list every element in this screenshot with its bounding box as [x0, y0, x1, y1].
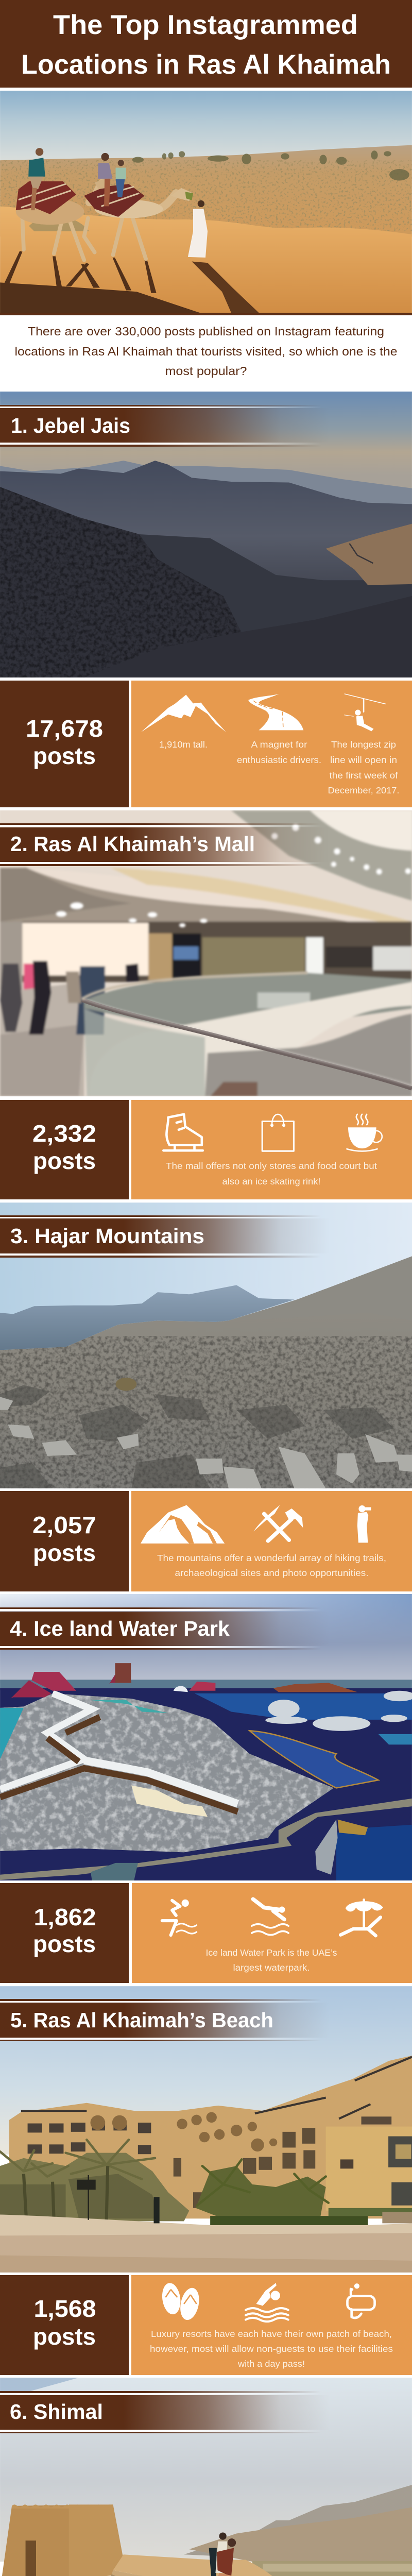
- stat: 2,332 posts: posts: [33, 1147, 96, 1174]
- facts panel: Jebel Jais: [131, 681, 412, 807]
- intro text: [14, 325, 398, 378]
- title banner: [0, 0, 412, 88]
- icon: zip line: [344, 694, 385, 731]
- stat: 17,678 posts: posts: [33, 742, 96, 769]
- facts panel: mall: [131, 1100, 412, 1199]
- stat: 1,862 posts: 1,862: [34, 1904, 96, 1930]
- facts panel: water park: [132, 1883, 412, 1983]
- heading: 5. Ras Al Khaimah's Beach: 5. Ras Al Khaimah’s Beach: [10, 2008, 273, 2032]
- facts panel: Jebel Jais: The longest zip: [331, 739, 396, 750]
- facts panel: water park: Ice land Water Park is the UAE’s: [206, 1947, 337, 1958]
- heading: 4. Ice land Water Park: 4. Ice land Water Park: [10, 1617, 230, 1640]
- facts panel: Hajar Mountains: archaeological sites and photo opportunities.: [175, 1568, 369, 1578]
- section 4: Ice land Water Park: [0, 1594, 412, 1983]
- icon: snorkel mask: [347, 2283, 375, 2318]
- section 2: Ras Al Khaimah's Mall: [0, 810, 412, 1199]
- stat: 1,862 posts: posts: [33, 1930, 96, 1957]
- photo: Hajar Mountains: [0, 1202, 412, 1488]
- stat: 17,678 posts: 17,678: [26, 715, 103, 742]
- icon: snowy mountain: [141, 1505, 225, 1544]
- heading: 3. Hajar Mountains: 3. Hajar Mountains: [10, 1224, 204, 1248]
- icon: diver on platform: [162, 1900, 197, 1935]
- facts panel: mall: The mall offers not only stores and food court but: [166, 1161, 377, 1171]
- facts panel: beach: [131, 2275, 412, 2375]
- stat: 2,057 posts: [0, 1491, 129, 1591]
- facts panel: Jebel Jais: line will open in: [330, 755, 397, 765]
- photo: Jebel Jais mountains: [0, 392, 412, 677]
- photo: Ice land Water Park: [0, 1594, 412, 1880]
- section 3: Hajar Mountains: [0, 1202, 412, 1591]
- icon: flip flops: [160, 2282, 202, 2321]
- section 6: Shimal: [0, 2378, 412, 2576]
- heading: 5. Ras Al Khaimah's Beach: [0, 1999, 412, 2041]
- stat: 1,862 posts: [0, 1883, 129, 1983]
- stat: 1,568 posts: 1,568: [34, 2295, 96, 2322]
- heading: 1. Jebel Jais: 1. Jebel Jais: [11, 414, 130, 437]
- icon: mountain: [141, 694, 226, 732]
- hero photo: camel ride in the desert: [0, 91, 412, 313]
- header block: title, hero photo and intro: [0, 0, 412, 378]
- facts panel: beach: Luxury resorts have each have their own patch of beach,: [151, 2329, 392, 2339]
- icon: crossed pick and hammer: [253, 1505, 303, 1541]
- heading: 6. Shimal: [0, 2391, 412, 2433]
- facts panel: beach: however, most will allow non-guests to use their facilities: [150, 2344, 393, 2354]
- icon: shopping bag: [262, 1114, 294, 1151]
- heading: 1. Jebel Jais: [0, 405, 412, 447]
- photo: Shimal fort and palms: [0, 2378, 412, 2576]
- stat: 1,568 posts: [0, 2275, 129, 2375]
- facts panel: beach: with a day pass!: [237, 2359, 305, 2369]
- icon: beach umbrella and lounger: [340, 1900, 383, 1936]
- stat: 2,332 posts: 2,332: [32, 1120, 96, 1147]
- icon: ice skate: [163, 1114, 203, 1150]
- facts panel: Jebel Jais: A magnet for: [251, 739, 307, 750]
- facts panel: Jebel Jais: December, 2017.: [328, 785, 400, 795]
- icon: winding road: [248, 694, 303, 730]
- section 5: Ras Al Khaimah's Beach: [0, 1986, 412, 2375]
- facts panel: Jebel Jais: enthusiastic drivers.: [237, 755, 321, 765]
- heading: 2. Ras Al Khaimah's Mall: 2. Ras Al Khaimah’s Mall: [10, 832, 255, 856]
- stat: 2,332 posts: [0, 1100, 129, 1199]
- intro text: most popular?: [165, 364, 247, 378]
- intro text: locations in Ras Al Khaimah that tourists visited, so which one is the: [14, 345, 398, 358]
- icon: swimmer: [246, 2283, 288, 2321]
- icon: coffee cup: [347, 1114, 382, 1151]
- stat: 17,678 posts: [0, 681, 129, 807]
- facts panel: mall: also an ice skating rink!: [222, 1176, 320, 1187]
- facts panel: water park: largest waterpark.: [233, 1962, 310, 1973]
- title banner: Locations in Ras Al Khaimah: [21, 49, 391, 80]
- stat: 1,568 posts: posts: [33, 2323, 96, 2350]
- heading: 3. Hajar Mountains: [0, 1215, 412, 1258]
- icon: diving swimmer: [252, 1899, 288, 1935]
- intro text: There are over 330,000 posts published on Instagram featuring: [28, 325, 384, 338]
- heading: 6. Shimal: 6. Shimal: [10, 2400, 103, 2424]
- divider under hero: [0, 313, 412, 315]
- section 1: Jebel Jais: [0, 392, 412, 807]
- facts panel: Hajar Mountains: The mountains offer a wonderful array of hiking trails,: [157, 1553, 386, 1563]
- facts panel: Jebel Jais: the first week of: [330, 770, 398, 781]
- title banner: The Top Instagrammed: [53, 10, 358, 40]
- heading: 2. Ras Al Khaimah's Mall: [0, 823, 412, 866]
- heading: 4. Ice land Water Park: [0, 1607, 412, 1650]
- stat: 2,057 posts: posts: [33, 1539, 96, 1566]
- facts panel: Jebel Jais: 1,910m tall.: [159, 739, 208, 750]
- stat: 2,057 posts: 2,057: [32, 1512, 96, 1538]
- photo: beach resort: [0, 1986, 412, 2273]
- icon: photographer: [357, 1505, 371, 1543]
- photo: mall interior: [0, 810, 412, 1096]
- facts panel: Hajar Mountains: [131, 1491, 412, 1591]
